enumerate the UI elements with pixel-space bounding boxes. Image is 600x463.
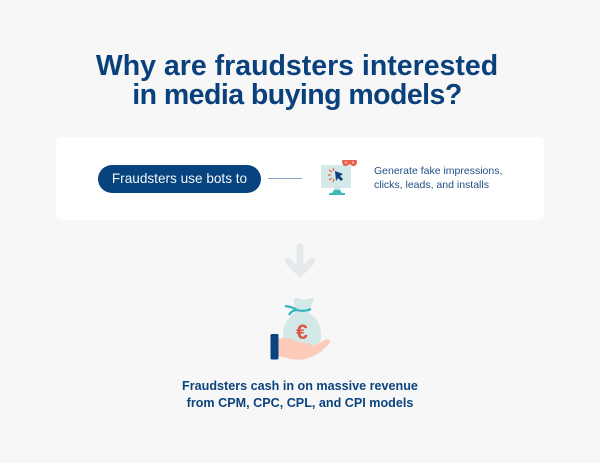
pill: fraudsters use bots: Fraudsters use bots to xyxy=(112,171,247,186)
panel: bots xyxy=(56,137,544,220)
hand xyxy=(278,338,330,360)
icon: hand holding euro money bag xyxy=(270,298,330,360)
arrow: down xyxy=(285,243,315,278)
text: generate fake impressions: clicks, leads, and installs xyxy=(374,178,489,190)
cuff xyxy=(270,334,278,360)
icon: monitor with cursor and mask xyxy=(321,160,357,195)
caption xyxy=(182,379,418,410)
title: Why are fraudsters interested xyxy=(96,50,498,82)
connector line xyxy=(268,178,302,179)
caption: Fraudsters cash in on massive revenue xyxy=(182,379,418,393)
title: in media buying models? xyxy=(132,79,462,111)
pill: fraudsters use bots xyxy=(98,165,261,193)
text: generate fake impressions: Generate fake impressions, xyxy=(374,165,502,177)
text: generate fake impressions xyxy=(374,165,502,190)
title xyxy=(96,50,498,111)
caption: from CPM, CPC, CPL, and CPI models xyxy=(187,396,413,410)
money bag: € xyxy=(296,321,308,344)
